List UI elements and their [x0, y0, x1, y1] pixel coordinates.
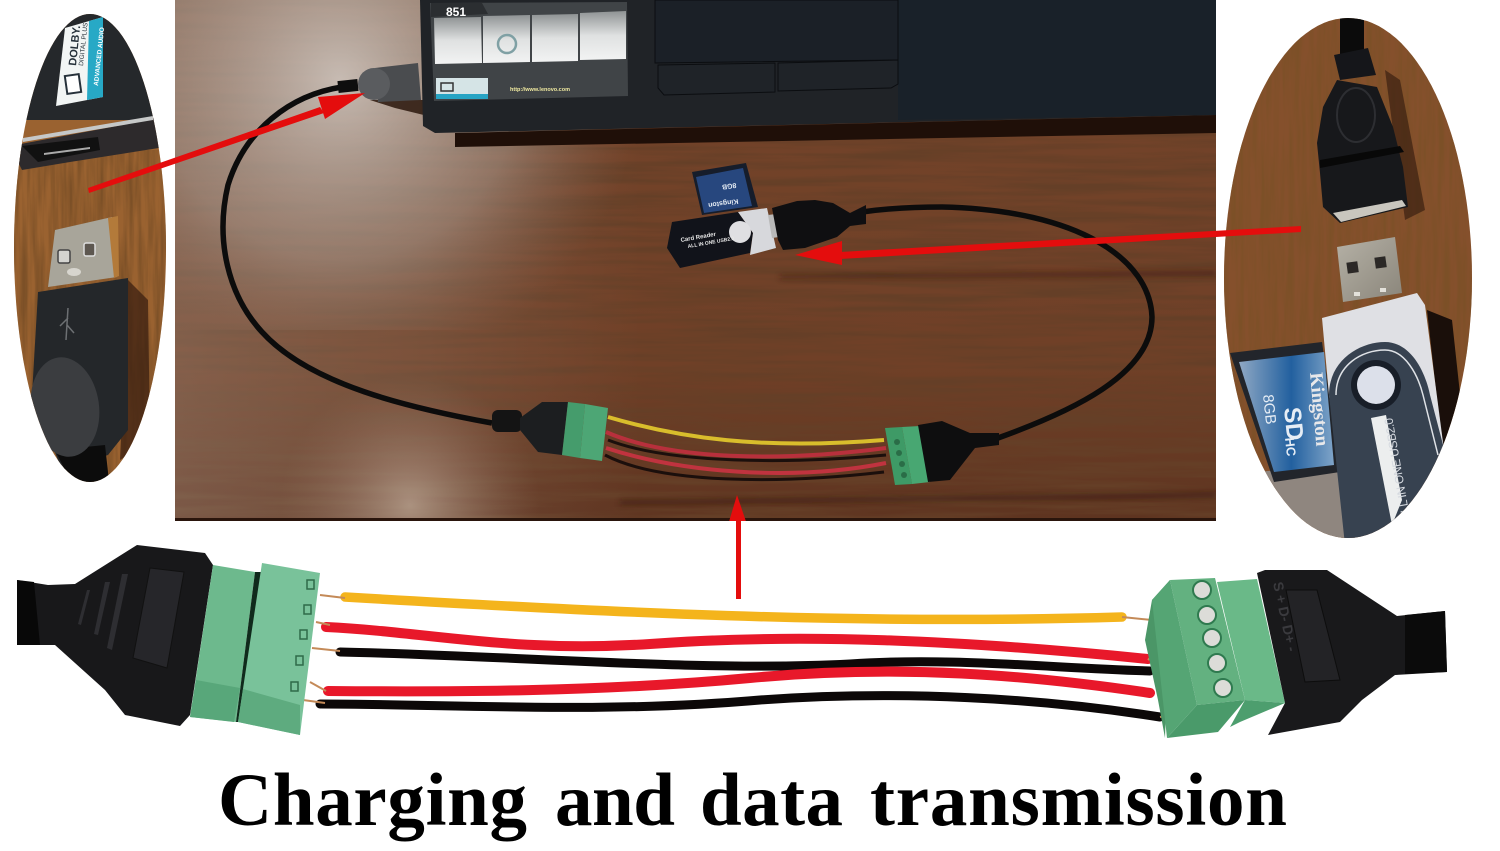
card reader swivel: LL IN ONE USB2.0 — [1381, 417, 1412, 514]
thin wires between small connectors — [605, 417, 886, 480]
vertical arrow shaft from large wires to photo — [736, 521, 741, 599]
wooden desk — [175, 0, 1216, 521]
SD card and card reader: ALL IN ONE USB2.0 — [687, 236, 735, 250]
laptop USB plug — [337, 63, 421, 102]
laptop sticker panel: 851 — [446, 5, 466, 19]
wood background — [10, 0, 170, 490]
SD card and card reader — [667, 163, 779, 268]
wood background — [1220, 15, 1474, 545]
panel: enlarged five-wire connector — [17, 545, 1447, 738]
SD card and card reader: 8GB — [721, 181, 737, 190]
Dolby sticker: DIGITAL PLUS — [78, 22, 90, 66]
SD card and card reader: Card Reader — [680, 232, 717, 244]
panel: right oval close-up of USB female plug and card reader — [1220, 15, 1474, 545]
SD card: Kingston — [1305, 372, 1332, 447]
card reader swivel — [1322, 293, 1465, 545]
icon: USB symbol on plug — [60, 308, 74, 340]
copper wire ends — [303, 595, 1172, 717]
title — [218, 759, 1287, 842]
USB female plug and cable — [1317, 15, 1408, 223]
left pointer into photo — [88, 93, 365, 193]
laptop — [370, 0, 1216, 147]
USB male connector of reader — [1337, 237, 1402, 302]
title: transmission — [870, 759, 1287, 842]
right black plug: S + D- D+ - — [1270, 580, 1301, 653]
SD card: SD — [1278, 406, 1308, 442]
cable from right connector to card reader plug — [862, 207, 1152, 438]
right green terminal — [1145, 578, 1285, 738]
right black plug — [1257, 570, 1447, 735]
title: data — [700, 759, 843, 842]
SD card — [1230, 342, 1340, 482]
cable from USB plug to left connector — [223, 87, 492, 423]
five wires — [320, 597, 1160, 717]
up arrow head into photo — [729, 495, 746, 521]
small left connector — [492, 402, 608, 461]
laptop sticker panel: http://www.lenovo.com — [510, 87, 570, 93]
SD card: 8GB — [1259, 394, 1279, 425]
Dolby sticker: ADVANCED AUDIO — [93, 27, 106, 86]
panel: left oval close-up of USB male plug and laptop port — [10, 0, 170, 490]
laptop edge — [19, 14, 159, 170]
panel: main photo of laptop, cable and card reader — [175, 0, 1216, 545]
Dolby sticker: DOLBY. — [67, 25, 83, 66]
Dolby sticker — [56, 17, 106, 106]
laptop sticker panel — [430, 2, 628, 101]
SD card and card reader: Kingston — [708, 197, 739, 208]
card reader USB female plug — [772, 200, 866, 250]
USB male plug — [24, 216, 128, 490]
right pointer arrow — [795, 226, 1301, 265]
left black plug — [17, 545, 213, 726]
title: and — [555, 759, 675, 842]
title: Charging — [218, 759, 527, 842]
left green terminal — [190, 563, 320, 735]
SD card: HC — [1282, 437, 1299, 458]
small right connector — [885, 421, 999, 485]
